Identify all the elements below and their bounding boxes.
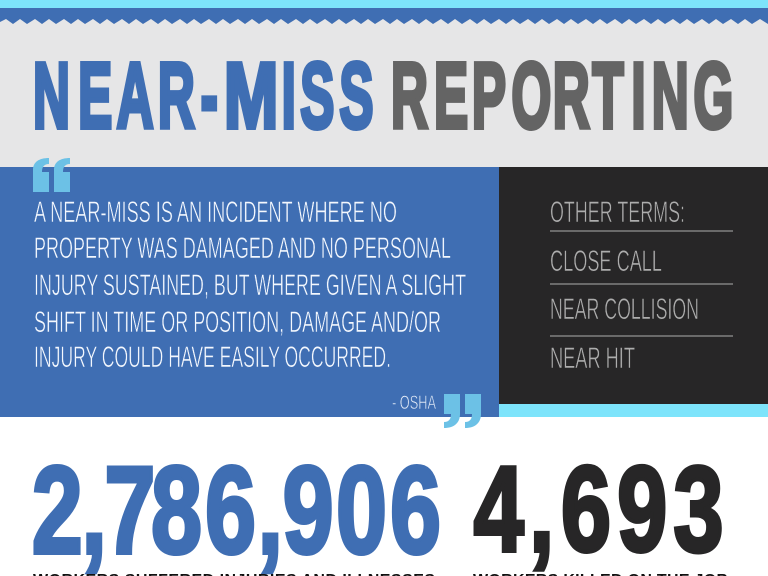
title: M: [224, 44, 278, 148]
terms list: [550, 196, 699, 375]
header panel: [0, 19, 768, 167]
panel: other terms: [499, 167, 768, 417]
blue band: [0, 8, 768, 26]
icon: opening quote mark: [33, 158, 70, 192]
quote text: SHIFT IN TIME OR POSITION, DAMAGE AND/OR: [34, 306, 441, 339]
top cyan stripe: [0, 0, 768, 8]
statistic: deaths number: 4,693: [474, 441, 724, 576]
terms list: CLOSE CALL: [550, 245, 662, 278]
quote text: PROPERTY WAS DAMAGED AND NO PERSONAL: [34, 232, 451, 265]
terms list: NEAR HIT: [550, 342, 635, 375]
panel: definition quote: [0, 167, 499, 417]
attribution: - OSHA: [392, 393, 436, 414]
title: NEAR-: [33, 43, 218, 147]
icon: closing quote mark: [444, 394, 481, 428]
quote text: INJURY SUSTAINED, BUT WHERE GIVEN A SLIGHT: [34, 269, 466, 302]
title: ISS: [282, 43, 373, 147]
title: REPORTING: [391, 43, 733, 147]
title: [33, 43, 733, 148]
quote text: [34, 196, 466, 374]
quote text: INJURY COULD HAVE EASILY OCCURRED.: [34, 341, 391, 374]
quote text: A NEAR-MISS IS AN INCIDENT WHERE NO: [34, 196, 397, 229]
